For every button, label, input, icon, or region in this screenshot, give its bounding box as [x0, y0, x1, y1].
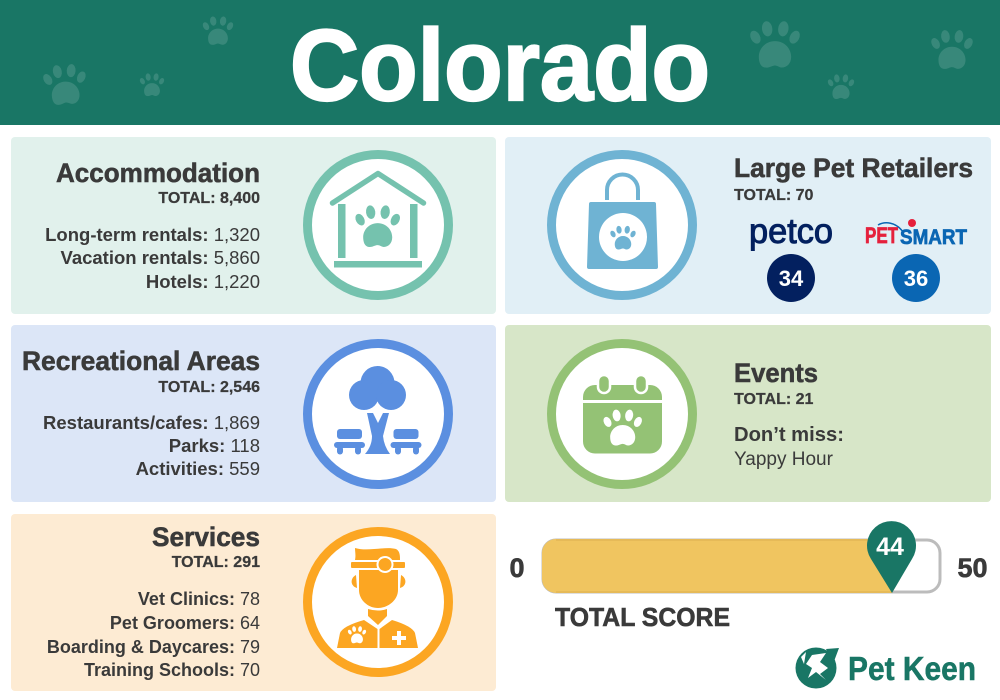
icon: calendar	[552, 344, 692, 484]
petco count: 34	[779, 266, 804, 291]
score scale minimum: 0	[509, 553, 525, 583]
services list: Training Schools: 70	[84, 660, 260, 680]
petco count	[767, 254, 815, 302]
panel: large pet retailers	[505, 137, 991, 314]
services list	[47, 589, 260, 680]
logo: petsmart: PET	[865, 223, 898, 248]
icon: tree and benches	[308, 344, 448, 484]
recreational total: TOTAL: 2,546	[158, 379, 260, 396]
title: Colorado	[290, 10, 710, 122]
accommodation list: Hotels: 1,220	[146, 271, 260, 292]
don't miss label: Don’t miss:	[734, 424, 844, 446]
events total: TOTAL: 21	[734, 391, 814, 408]
icon: dog house	[308, 154, 448, 296]
background paw prints	[41, 16, 975, 106]
recreational list: Restaurants/cafes: 1,869	[43, 412, 260, 433]
petsmart count: 36	[904, 266, 928, 291]
panel: accommodation	[11, 137, 496, 314]
logo: petco: petco	[749, 212, 833, 251]
recreational list	[43, 412, 260, 479]
event name: Yappy Hour	[734, 449, 834, 470]
accommodation total: TOTAL: 8,400	[158, 190, 260, 207]
panel: events	[505, 325, 991, 502]
services list: Vet Clinics: 78	[138, 589, 260, 609]
score marker pin: 44	[876, 533, 904, 561]
logo: petsmart	[865, 219, 967, 249]
logo: pet keen	[796, 648, 976, 688]
panel: recreational areas	[11, 325, 496, 502]
score marker pin	[867, 521, 916, 593]
accommodation list: Long-term rentals: 1,320	[45, 224, 260, 245]
accommodation list	[45, 224, 260, 292]
logo mark	[796, 648, 839, 688]
recreational list: Activities: 559	[136, 458, 260, 479]
heading: recreational areas: Recreational Areas	[22, 346, 260, 376]
logo wordmark: Pet Keen	[848, 650, 976, 687]
icon: veterinarian	[308, 532, 448, 672]
heading: events: Events	[734, 358, 818, 388]
total score label: TOTAL SCORE	[555, 602, 730, 632]
heading: large pet retailers: Large Pet Retailers	[734, 153, 973, 183]
services list: Pet Groomers: 64	[110, 613, 260, 633]
retailers total: TOTAL: 70	[734, 187, 814, 204]
logo: petsmart: SMART	[900, 226, 967, 249]
panel: services	[11, 514, 496, 691]
services total: TOTAL: 291	[172, 554, 260, 571]
recreational list: Parks: 118	[169, 435, 260, 456]
services list: Boarding & Daycares: 79	[47, 637, 260, 657]
accommodation list: Vacation rentals: 5,860	[60, 247, 260, 268]
header banner	[0, 0, 1000, 125]
score scale maximum: 50	[957, 553, 988, 583]
heading: accommodation: Accommodation	[56, 158, 260, 188]
icon: shopping bag	[552, 154, 692, 296]
score bar	[542, 539, 940, 593]
petsmart count	[892, 254, 940, 302]
heading: services: Services	[152, 522, 260, 552]
